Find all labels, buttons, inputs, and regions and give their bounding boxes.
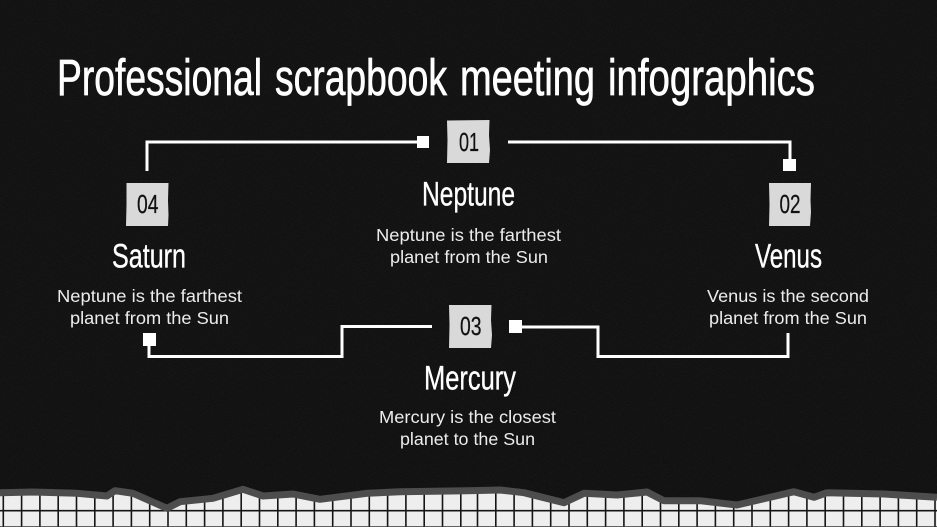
badge 02 <box>769 183 811 226</box>
title: meeting <box>460 49 595 106</box>
text: Saturn description: Neptune is the farthest <box>57 286 242 306</box>
text: Venus description <box>707 286 869 328</box>
badge 04 <box>126 183 168 226</box>
heading: Saturn: Saturn <box>112 238 186 276</box>
badge 02: 02 <box>780 189 800 219</box>
badge 03 <box>449 305 492 348</box>
text: Neptune description: planet from the Sun <box>390 247 548 267</box>
title <box>57 49 815 106</box>
panel: Saturn <box>57 183 242 328</box>
heading: Mercury: Mercury <box>424 360 516 398</box>
badge 01 <box>447 120 490 163</box>
text: Mercury description: planet to the Sun <box>400 429 535 449</box>
title: Professional <box>57 49 262 106</box>
badge 03: 03 <box>460 311 482 341</box>
text: Venus description: Venus is the second <box>707 286 869 306</box>
text: Mercury description: Mercury is the closest <box>379 407 556 427</box>
text: Venus description: planet from the Sun <box>709 308 867 328</box>
panel: Mercury <box>379 305 556 449</box>
panel: Neptune <box>376 120 561 267</box>
connector: Saturn to Neptune <box>147 136 429 171</box>
title: infographics <box>608 49 815 106</box>
connector: Mercury to Saturn <box>143 326 432 356</box>
heading: Neptune: Neptune <box>422 176 515 214</box>
heading: Venus: Venus <box>755 238 822 276</box>
title: scrapbook <box>275 49 447 106</box>
connector: Neptune to Venus <box>508 142 796 171</box>
text: Saturn description: planet from the Sun <box>70 308 229 328</box>
connector: Venus to Mercury <box>509 320 788 356</box>
badge 01: 01 <box>459 127 479 157</box>
text: Mercury description <box>379 407 556 449</box>
text: Saturn description <box>57 286 242 328</box>
text: Neptune description: Neptune is the farthest <box>376 225 561 245</box>
badge 04: 04 <box>137 189 158 219</box>
panel: Venus <box>707 183 869 328</box>
text: Neptune description <box>376 225 561 267</box>
